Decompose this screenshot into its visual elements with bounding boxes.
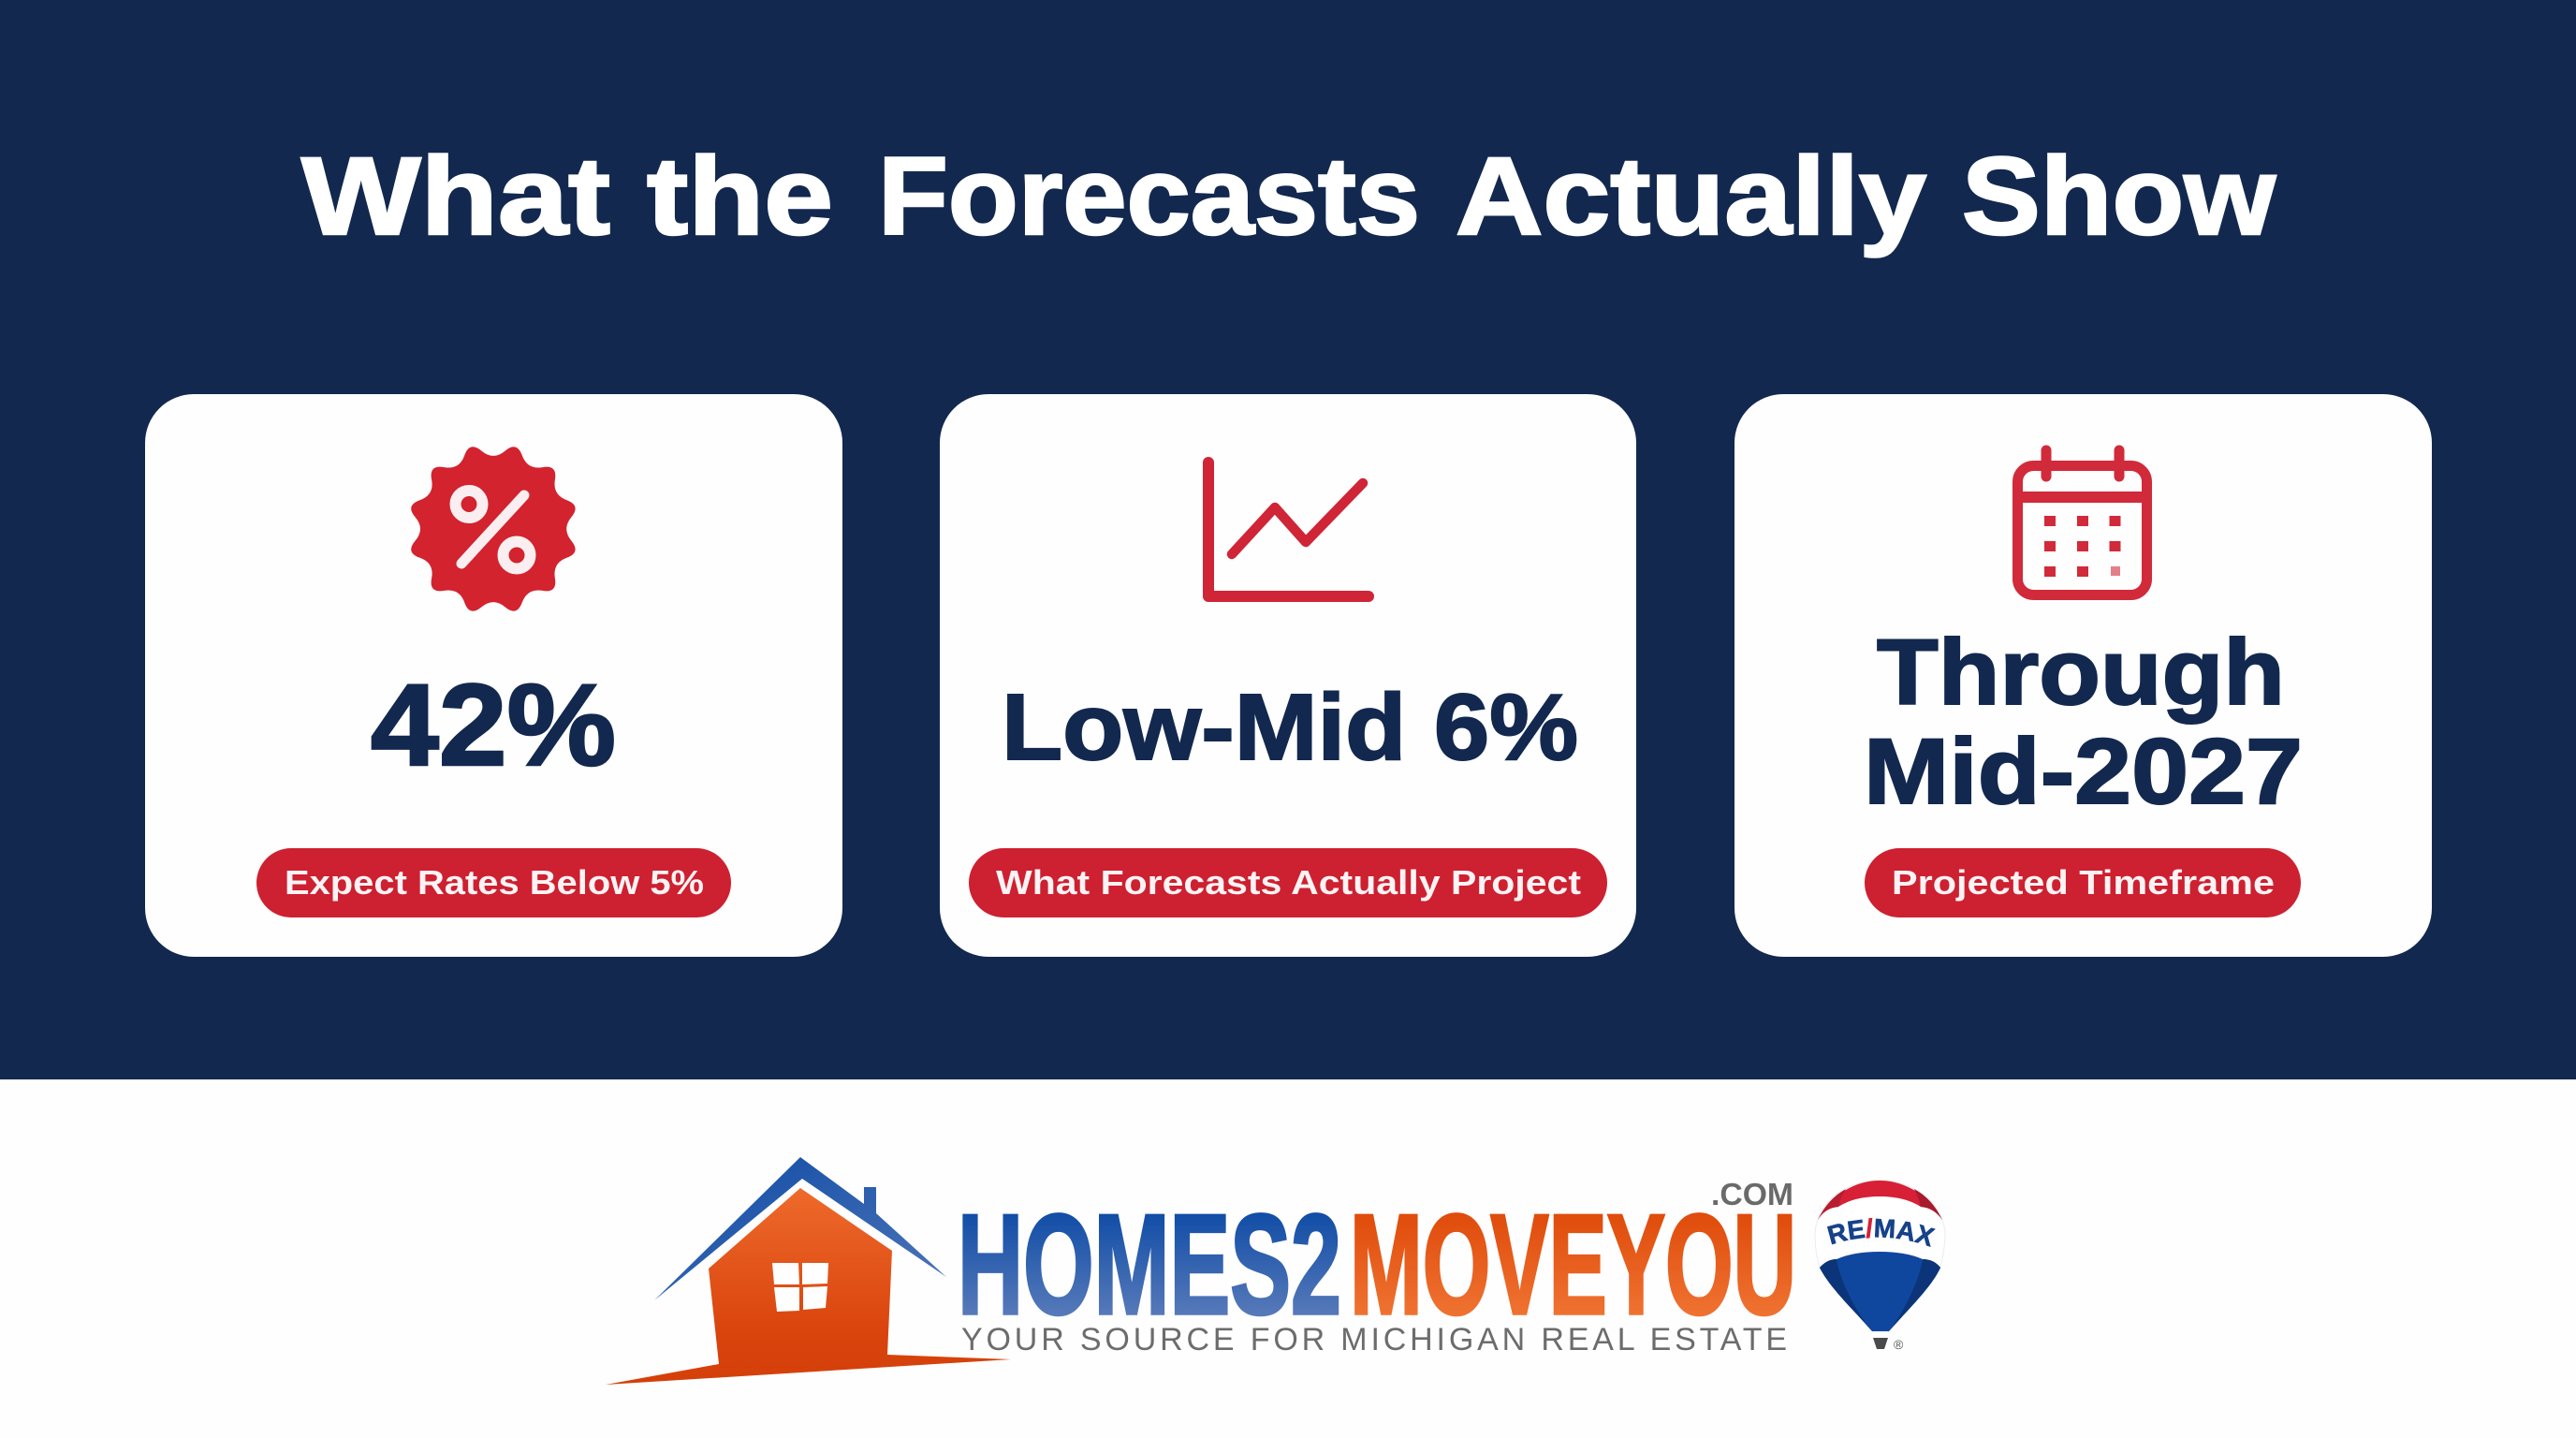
pill label: What Forecasts Actually Project <box>996 863 1581 902</box>
pill label <box>256 848 731 917</box>
stat: Through Mid-2027: Mid-2027 <box>1864 719 2303 823</box>
icon: house <box>606 1157 1011 1385</box>
panel: low-mid 6 percent <box>940 394 1636 957</box>
wordmark: HOMES2: HOMES2 <box>958 1185 1341 1344</box>
icon: calendar <box>2017 450 2147 595</box>
card background <box>145 394 842 957</box>
icon: percent badge <box>411 447 576 611</box>
icon: RE/MAX balloon: RE/MAX <box>1827 1217 1936 1247</box>
stat: Through Mid-2027 <box>1864 620 2303 823</box>
icon: line chart <box>1208 462 1368 596</box>
icon: RE/MAX balloon <box>1814 1180 1945 1352</box>
card background <box>1734 394 2432 957</box>
pill label <box>969 848 1607 917</box>
title <box>301 135 2276 258</box>
wordmark: .COM: .COM <box>1711 1177 1793 1211</box>
wordmark: MOVEYOU: MOVEYOU <box>1350 1185 1796 1344</box>
panel: through mid-2027 <box>1734 394 2432 957</box>
stat: 42%: 42% <box>371 661 616 790</box>
stat: Low-Mid 6%: Low-Mid 6% <box>1002 675 1578 780</box>
title: Show <box>1962 135 2276 258</box>
pill label: Projected Timeframe <box>1892 863 2275 902</box>
icon: RE/MAX balloon: ® <box>1894 1337 1904 1352</box>
stat: Through Mid-2027: Through <box>1877 620 2285 724</box>
card background <box>940 394 1636 957</box>
title: Actually <box>1456 135 1926 258</box>
title: Forecasts <box>878 135 1420 258</box>
footer logo <box>607 1157 1945 1385</box>
title: What <box>301 135 610 258</box>
pill label <box>1865 848 2301 917</box>
panel: 42 percent <box>145 394 842 957</box>
navy header background <box>0 0 2576 1079</box>
tagline: YOUR SOURCE FOR MICHIGAN REAL ESTATE <box>961 1322 1787 1357</box>
title: the <box>647 135 833 258</box>
pill label: Expect Rates Below 5% <box>285 863 704 902</box>
